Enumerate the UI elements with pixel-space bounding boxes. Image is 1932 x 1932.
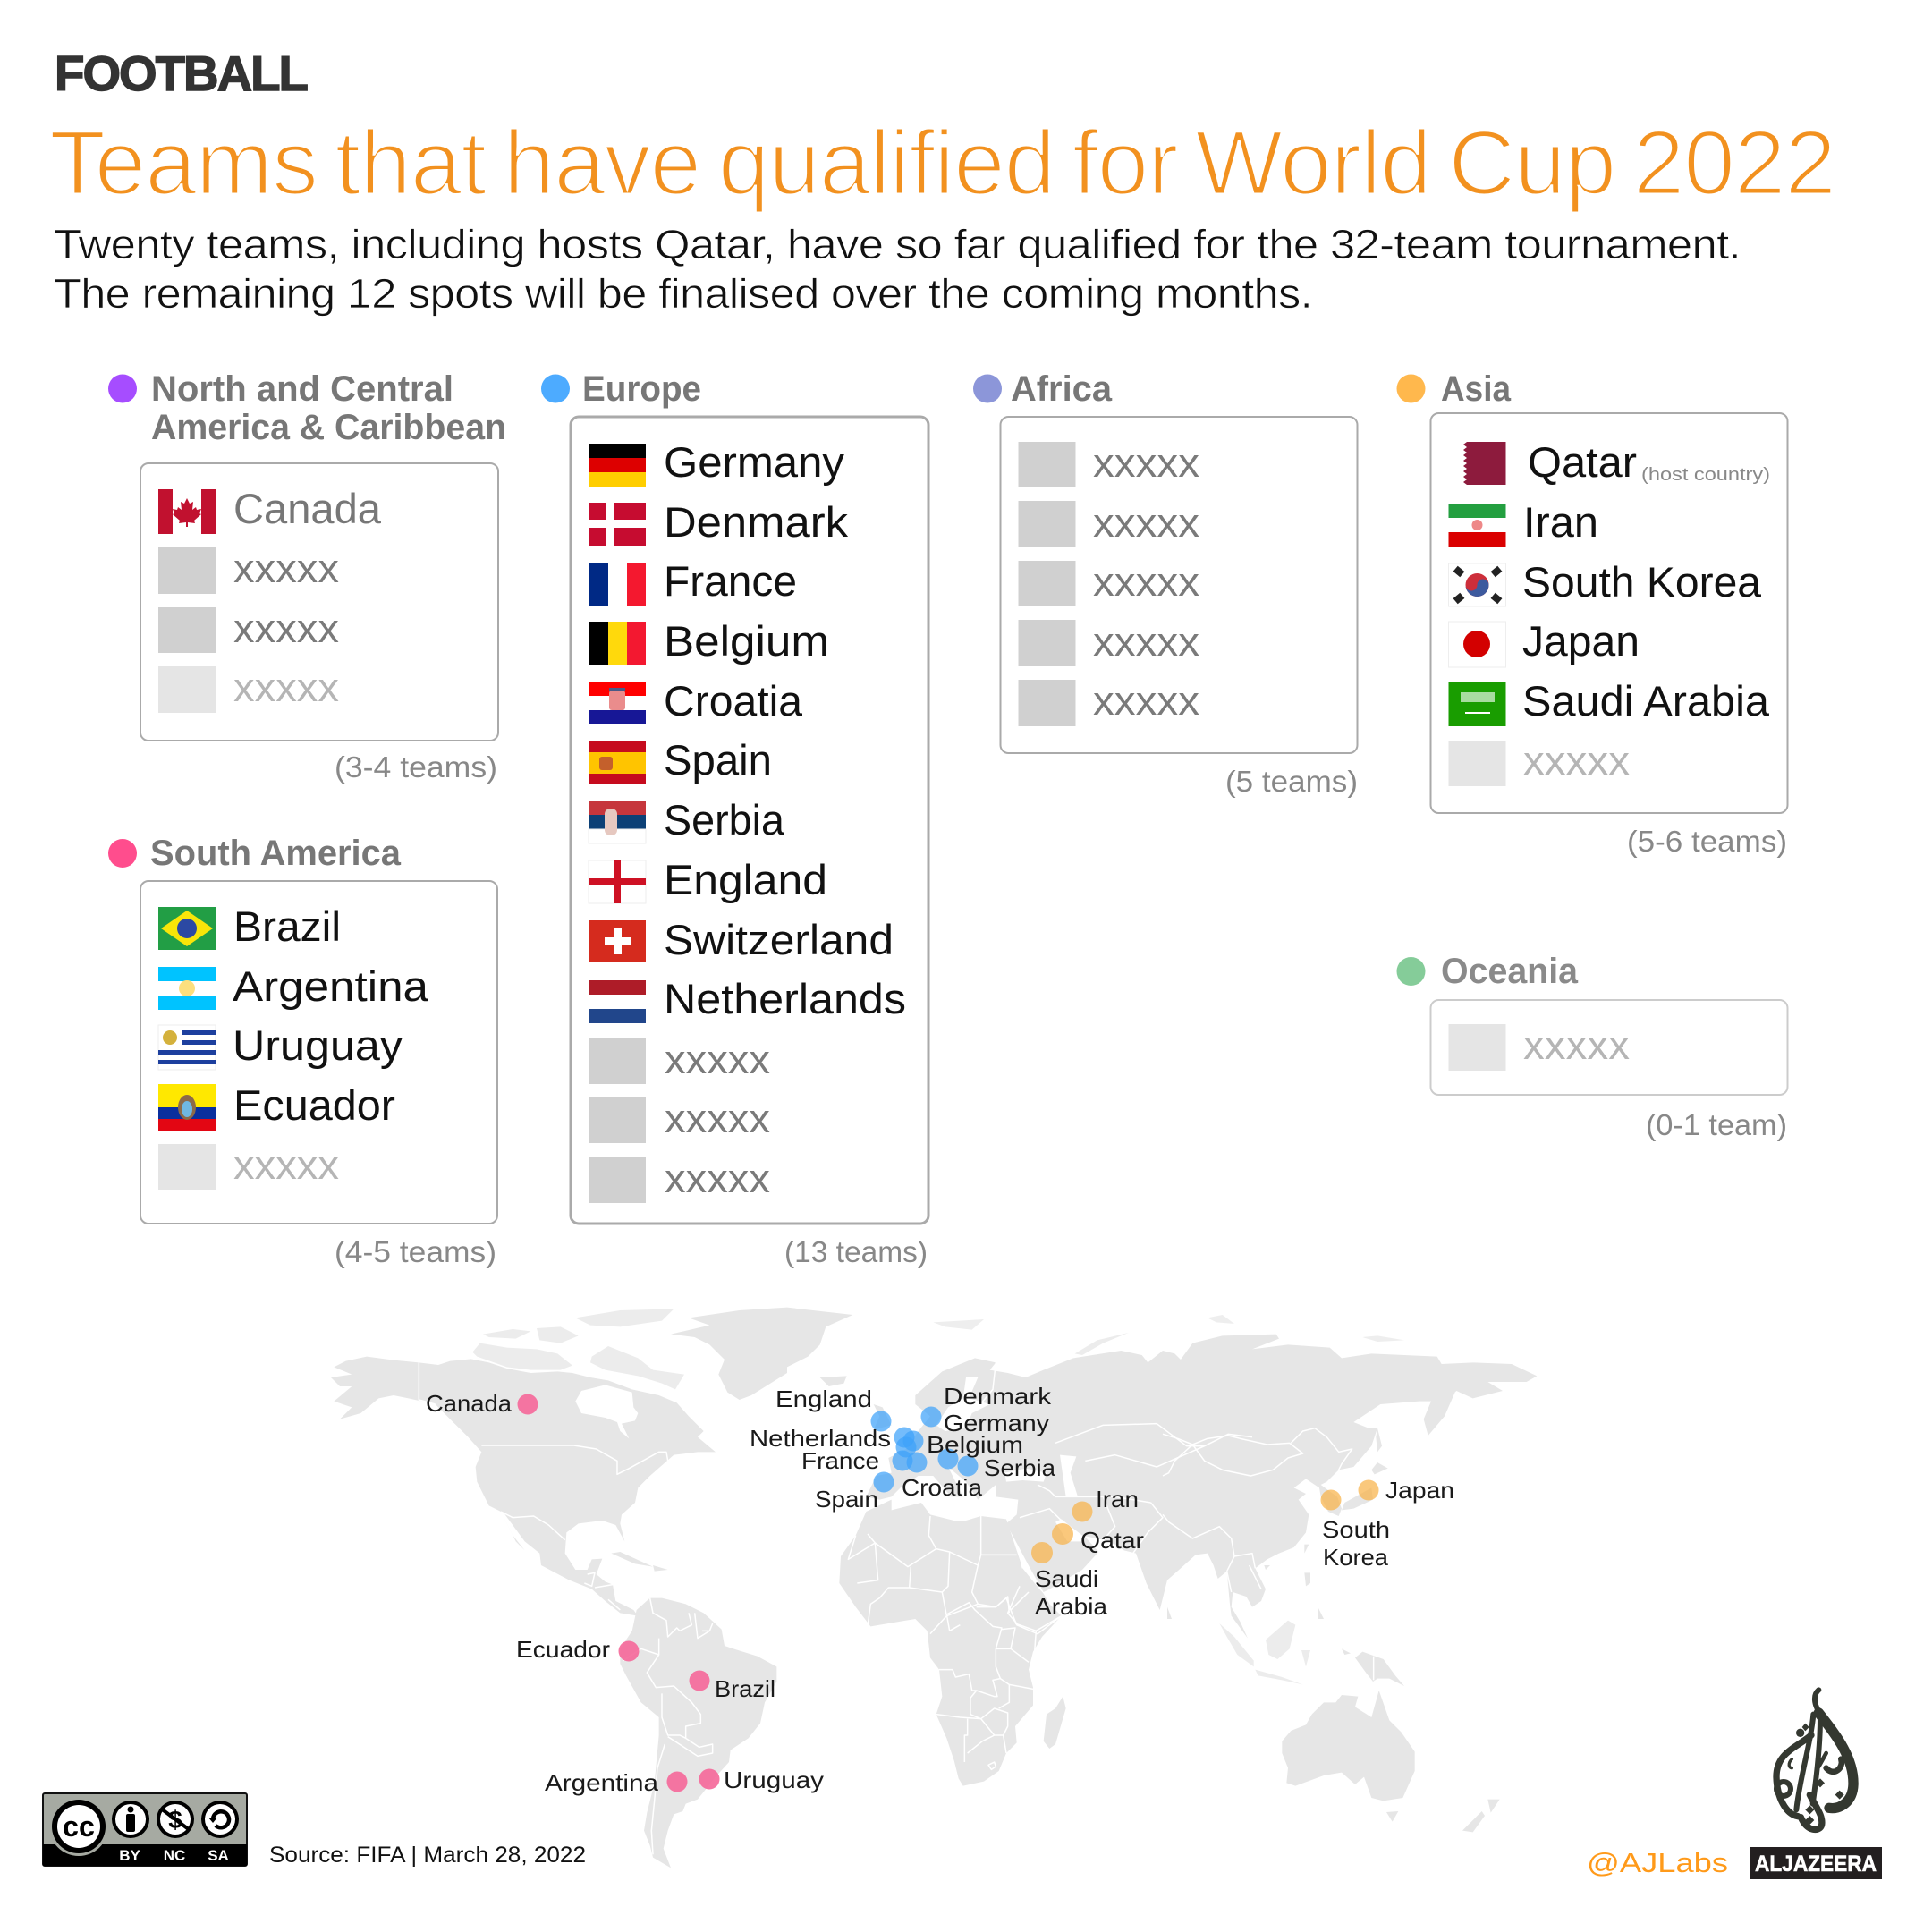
placeholder row <box>158 606 340 653</box>
badge: Creative Commons BY-NC-SA: NC <box>164 1847 185 1864</box>
team: Croatia: Croatia <box>664 677 803 724</box>
placeholder row <box>589 1156 771 1203</box>
flag: Argentina <box>158 967 216 1010</box>
flag: Qatar <box>1449 442 1506 485</box>
team count: (5 teams) <box>1225 765 1358 798</box>
flag: Denmark <box>589 503 646 546</box>
placeholder row, faded <box>1449 1022 1631 1071</box>
map base: land masses <box>331 1308 1537 1868</box>
map labels: Germany <box>944 1410 1049 1436</box>
team: Saudi Arabia: Saudi Arabia <box>1522 677 1770 724</box>
placeholder row <box>1018 440 1200 487</box>
team count: (3-4 teams) <box>335 750 497 784</box>
placeholder row <box>1018 559 1200 606</box>
map labels: Croatia <box>902 1474 983 1501</box>
map labels: Korea <box>1323 1544 1389 1571</box>
map labels: Qatar <box>1080 1527 1144 1554</box>
map labels: Belgium <box>927 1431 1023 1458</box>
heading: South America <box>150 834 402 873</box>
panel: South America <box>108 834 497 1268</box>
team: Serbia: Serbia <box>664 796 785 843</box>
placeholder row, faded: xxxxx <box>1523 738 1631 784</box>
map labels: France <box>801 1447 879 1474</box>
badge: Creative Commons BY-NC-SA: BY <box>119 1847 140 1864</box>
placeholder row, faded <box>1449 738 1631 786</box>
heading: Africa <box>1011 369 1113 409</box>
map labels: Iran <box>1096 1486 1139 1513</box>
placeholder row <box>1018 500 1200 547</box>
placeholder row <box>1018 678 1200 726</box>
panel: Africa <box>973 369 1358 798</box>
legend dot <box>108 374 137 402</box>
badge: Creative Commons BY-NC-SA <box>43 1793 247 1866</box>
box <box>571 417 928 1224</box>
placeholder row: xxxxx <box>1093 440 1200 486</box>
flag: Croatia <box>589 682 646 724</box>
placeholder row: xxxxx <box>1093 500 1200 546</box>
panel: Asia <box>1397 369 1787 858</box>
subtitle <box>54 221 1741 317</box>
team: France: France <box>664 557 797 605</box>
badge: Creative Commons BY-NC-SA: SA <box>208 1847 229 1864</box>
heading: Europe <box>582 369 701 409</box>
legend dot <box>973 374 1002 402</box>
team: Canada: Canada <box>233 485 382 532</box>
box <box>1431 1000 1787 1095</box>
heading: Asia <box>1441 369 1512 409</box>
map labels: Saudi <box>1035 1565 1098 1592</box>
box <box>1431 413 1787 813</box>
flag: Ecuador <box>158 1084 216 1131</box>
team count: (13 teams) <box>784 1235 928 1268</box>
map labels: Spain <box>815 1486 878 1513</box>
legend dot <box>108 839 137 868</box>
team: Uruguay: Uruguay <box>233 1021 403 1069</box>
team: Belgium: Belgium <box>664 617 829 665</box>
placeholder row: xxxxx <box>665 1037 771 1082</box>
map labels: Arabia <box>1035 1593 1108 1620</box>
logo: Al Jazeera calligraphic mark <box>1776 1690 1853 1829</box>
heading: America & Caribbean <box>151 408 506 447</box>
placeholder row, faded: xxxxx <box>233 1142 340 1188</box>
flag: Japan <box>1449 622 1506 667</box>
flag: Serbia <box>589 801 646 843</box>
placeholder row <box>158 546 340 594</box>
subtitle: Twenty teams, including hosts Qatar, have so far qualified for the 32-team tournament. <box>54 221 1741 267</box>
map labels: Argentina <box>545 1769 659 1796</box>
note: host country: (host country) <box>1641 465 1770 485</box>
team: Netherlands: Netherlands <box>664 975 906 1022</box>
placeholder row, faded: xxxxx <box>233 665 340 710</box>
panel: Europe <box>541 369 928 1268</box>
legend dot <box>1397 374 1426 402</box>
heading: North and Central <box>151 369 453 409</box>
flag: Canada <box>158 489 216 534</box>
map labels: Canada <box>426 1390 513 1417</box>
placeholder row: xxxxx <box>1093 559 1200 605</box>
placeholder row: xxxxx <box>665 1156 771 1201</box>
team count: (0-1 team) <box>1646 1108 1787 1141</box>
placeholder row: xxxxx <box>665 1096 771 1141</box>
placeholder row, faded: xxxxx <box>1523 1022 1631 1068</box>
box <box>140 881 497 1224</box>
team: Japan: Japan <box>1522 617 1640 665</box>
placeholder row: xxxxx <box>1093 678 1200 724</box>
flag: Germany <box>589 444 646 487</box>
team: South Korea: South Korea <box>1522 558 1762 606</box>
team: Spain: Spain <box>664 736 772 784</box>
team: Argentina: Argentina <box>233 962 429 1010</box>
legend dot <box>541 374 570 402</box>
team: Ecuador: Ecuador <box>233 1081 395 1129</box>
flag: Saudi Arabia <box>1449 682 1506 726</box>
placeholder row, faded <box>158 1142 340 1190</box>
team: Germany: Germany <box>664 438 845 486</box>
map markers: Americas <box>517 1394 719 1792</box>
title: Teams that have qualified for World Cup 2022 <box>49 112 1835 214</box>
flag: Brazil <box>158 907 216 950</box>
flag: Netherlands <box>589 980 646 1023</box>
placeholder row: xxxxx <box>233 546 340 591</box>
placeholder row <box>589 1096 771 1143</box>
panel: North and Central America & Caribbean <box>108 369 506 784</box>
map markers: Asia <box>1031 1479 1379 1563</box>
flag: Iran <box>1449 504 1506 547</box>
flag: Spain <box>589 741 646 784</box>
badge: Creative Commons BY-NC-SA: $ <box>168 1806 182 1834</box>
logo: ALJAZEERA wordmark: ALJAZEERA <box>1755 1852 1877 1877</box>
subtitle: The remaining 12 spots will be finalised over the coming months. <box>54 270 1312 317</box>
team: Brazil: Brazil <box>233 902 341 950</box>
team: England: England <box>664 856 827 903</box>
section label: FOOTBALL: FOOTBALL <box>55 46 307 101</box>
flag: Belgium <box>589 622 646 665</box>
team: Iran: Iran <box>1523 498 1598 546</box>
placeholder row: xxxxx <box>1093 619 1200 665</box>
placeholder row, faded <box>158 665 340 713</box>
map labels: Japan <box>1385 1477 1454 1504</box>
flag: France <box>589 563 646 606</box>
legend dot <box>1397 957 1426 986</box>
team: Switzerland: Switzerland <box>664 916 894 963</box>
map labels: Brazil <box>715 1675 775 1702</box>
map: world map of qualified teams <box>331 1308 1537 1868</box>
box <box>140 463 498 741</box>
handle: @AJLabs: @AJLabs <box>1587 1847 1728 1878</box>
map labels: South <box>1322 1516 1390 1543</box>
flag: Switzerland <box>589 920 646 962</box>
map labels <box>426 1383 1454 1796</box>
team: Qatar: Qatar <box>1528 438 1637 486</box>
flag: South Korea <box>1449 564 1506 606</box>
box <box>1000 417 1358 753</box>
source: Source: FIFA | March 28, 2022 <box>269 1843 586 1868</box>
map markers: Europe <box>871 1406 979 1492</box>
map labels: Denmark <box>944 1383 1052 1410</box>
placeholder row <box>1018 619 1200 666</box>
team count: (5-6 teams) <box>1627 825 1787 858</box>
panel: Oceania <box>1397 952 1787 1141</box>
flag: Uruguay <box>158 1025 216 1070</box>
team: Denmark: Denmark <box>664 498 849 546</box>
heading <box>151 369 506 447</box>
heading: Oceania <box>1441 952 1579 991</box>
map labels: Serbia <box>984 1454 1056 1481</box>
team count: (4-5 teams) <box>335 1235 496 1268</box>
badge: Creative Commons BY-NC-SA: cc <box>63 1810 95 1843</box>
placeholder row: xxxxx <box>233 606 340 651</box>
map labels: England <box>775 1385 872 1412</box>
placeholder row <box>589 1037 771 1084</box>
flag: England <box>589 860 646 903</box>
map labels: Ecuador <box>516 1636 610 1663</box>
map labels: Uruguay <box>724 1767 824 1793</box>
map labels: Netherlands <box>750 1425 891 1452</box>
